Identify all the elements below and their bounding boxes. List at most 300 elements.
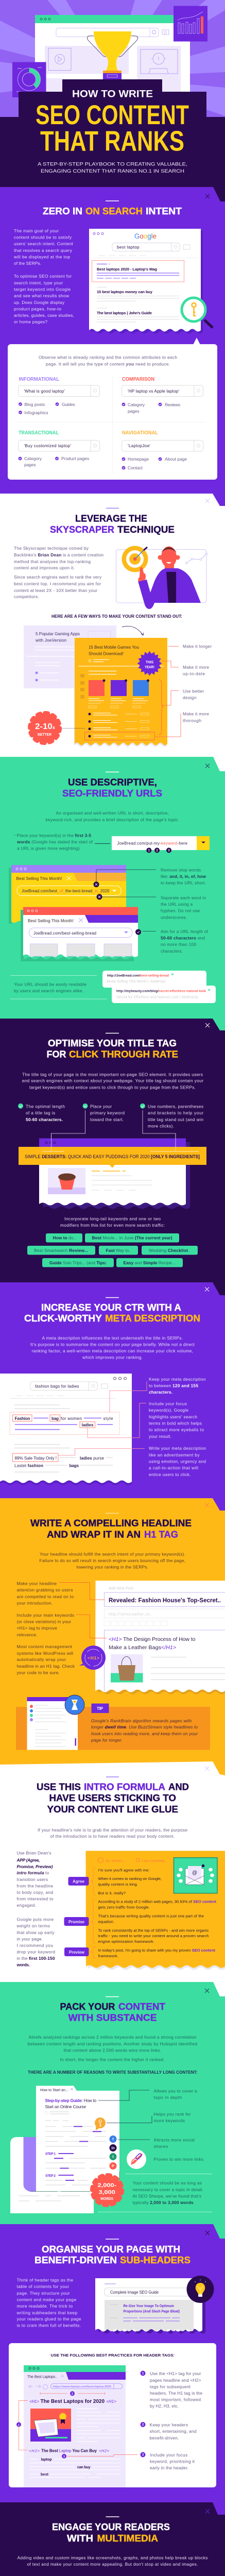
heading: CLICK THROUGH RATE <box>69 1049 178 1059</box>
panel: zero in on search intent <box>0 187 225 510</box>
text block: intro: target keyword into Google <box>14 286 71 292</box>
list: header tag tips: headers. The H1 tag is the <box>150 2391 202 2396</box>
type: informational: Blog posts <box>25 402 45 407</box>
text block: intro: keyword-rich, and provides a brief description of the page's topic. <box>45 817 179 822</box>
illustration: long article: How to Start an... <box>40 2089 68 2092</box>
illustration: intro example document: engine optimization framework. <box>98 1939 154 1944</box>
callouts: URL tips: to keep the URL short. <box>161 880 206 885</box>
text block: intro: competitors. <box>14 594 39 599</box>
tips: title tag checklist: and brackets to help your <box>148 1110 203 1115</box>
heading: LEVERAGE THE <box>75 513 147 523</box>
arrow: curved <box>122 626 144 635</box>
title: THAT RANKS <box>40 125 184 157</box>
heading: SKYSCRAPER <box>50 524 114 535</box>
list: header tag tips: by H2, H3, etc. <box>150 2403 179 2409</box>
type: informational: 'What is good laptop' <box>24 389 65 394</box>
illustration: improved document: Should Download! <box>89 651 124 656</box>
pills: keyword modifiers: Fast Way to.. <box>106 1248 131 1253</box>
type: comparison: Reviews <box>165 402 180 407</box>
illustration: intro example document: But is it, really? <box>98 1891 126 1895</box>
text block: intro: and see what results show <box>14 293 70 298</box>
text block: intro: will be displayed at the top <box>13 255 70 260</box>
illustration: CMS editor: Add New Post <box>109 1586 134 1590</box>
text block: intro: It's purpose is to summarise the content on your page briefly. While not a direct <box>30 1342 195 1347</box>
text block: APP formula: Use Brian Dean's <box>16 1851 51 1856</box>
text block: headline tips <box>16 1581 75 1675</box>
callouts: reasons for long content: topic in depth <box>153 2095 182 2100</box>
heading: USE THIS <box>37 1782 81 1792</box>
callouts: improvements: Make it more <box>183 665 209 670</box>
illustration: CMS editor <box>95 1581 225 1694</box>
text block: headline tips: your introduction. <box>16 1600 53 1605</box>
heading: USE DESCRIPTIVE, <box>68 777 157 787</box>
text block: intro: search intent, type your <box>14 280 63 285</box>
callout: keyword placement: Place your keyword(s) in the first 3-5 <box>16 833 91 838</box>
callouts: meta description tips: highlights users' search <box>149 1414 197 1419</box>
chart card: donut <box>12 62 46 97</box>
text block: headline tips: Make your headline <box>16 1581 57 1586</box>
illustration: SERP snippets: http://JoeBread.com/best-selling-bread <box>107 974 169 978</box>
type: informational: Guides <box>62 402 75 407</box>
callouts: meta description tips: Keep your meta description <box>149 1377 206 1382</box>
illustration: search result with meta description <box>0 1374 132 1485</box>
text block: headline tips: relevance. <box>16 1632 37 1637</box>
illustration: header tags browser <box>24 2365 126 2487</box>
text block: intro: your readers glued to the page <box>16 2316 81 2321</box>
callouts: meta description tips: entice users to click. <box>149 1472 191 1477</box>
text block: headline tips: headline in an H1 tag. Check <box>16 1664 75 1669</box>
panel: pack your content <box>0 1982 225 2241</box>
tips: title tag checklist: title tag stand out (and win <box>148 1117 203 1122</box>
type: informational: INFORMATIONAL <box>19 376 60 382</box>
heading <box>62 777 162 799</box>
text block: headline tips: are compelled to read on to <box>16 1594 74 1599</box>
text block: APP formula: drop your keyword <box>16 1950 55 1955</box>
heading: INCREASE YOUR CTR WITH A <box>41 1302 181 1313</box>
callouts: reasons for long content: more keywords <box>153 2118 185 2123</box>
subtitle: ENGAGING CONTENT THAT RANKS NO.1 IN SEARCH <box>41 168 184 174</box>
callouts: meta description tips: a call-to-action that will <box>149 1465 198 1470</box>
illustration: search result with meta description: Lastet fashion <box>14 1463 43 1468</box>
panel: search intent types <box>8 338 217 480</box>
badge: 2-10x better: BETTER <box>38 732 52 737</box>
icons: key and social <box>95 2117 146 2170</box>
tip box: RankBrain <box>16 1695 210 1750</box>
heading: ZERO IN <box>43 206 82 216</box>
badge: 2,000-3,000 words: WORDS <box>100 2197 113 2201</box>
callouts: improvements <box>154 644 212 737</box>
badge: this year <box>137 651 162 676</box>
heading: AND <box>168 1782 189 1792</box>
illustration: improved document <box>74 638 167 747</box>
badge: this year: YEAR! <box>145 666 154 669</box>
illustration: improved document: 15 Best Mobile Games You <box>89 645 139 650</box>
heading <box>30 1518 192 1539</box>
text block: intro: writing subheaders that keep <box>16 2310 77 2315</box>
list: header tag tips: Include your focus <box>150 2452 187 2458</box>
callouts: improvements: thorough <box>183 718 201 723</box>
text block: intro: articles, guides, case studies, <box>14 313 74 318</box>
callout: keyword placement: 1 <box>148 849 150 852</box>
illustration: CMS editor: <H1> The Design Process of How to <box>109 1636 196 1642</box>
text block: intro: Ahrefs analyzed rankings across 2 million keywords and found a strong correlation <box>29 2035 197 2040</box>
badge: 2-10x better <box>30 713 85 743</box>
list: header tag tips: short, entertaining, and <box>149 2429 197 2434</box>
callouts: URL tips: 50-60 characters and <box>161 936 205 941</box>
heading <box>43 206 182 216</box>
illustration: search result with meta description: ladies purse <box>80 1456 104 1461</box>
list: header tag tips: Keep your headers <box>149 2422 188 2428</box>
text block: intro: A meta description influences the text underneath the title in SERPs. <box>42 1335 183 1341</box>
illustration: search result with meta description: ladies <box>81 1423 94 1427</box>
callout: keyword placement: a URL is given more weighting). <box>17 846 81 851</box>
callouts: URL tips: Remove stop words <box>161 868 201 873</box>
text block: content length: typically 2,000 to 3,000 words. <box>133 2200 195 2205</box>
tip box: RankBrain: hook users into reading more, and keep them on your <box>91 1731 198 1736</box>
illustration: search result with meta description: Fashion <box>14 1416 30 1421</box>
text block: APP formula: transition users <box>16 1877 48 1882</box>
callouts: reasons for long content: Allows you to cover a <box>153 2089 197 2094</box>
badge: 2-10x better: 2-10x <box>35 722 55 731</box>
text block: intro: of the SERPs. <box>14 261 41 266</box>
illustration: original document: with JoeVersion <box>35 638 66 643</box>
type: transactional: TRANSACTIONAL <box>19 430 59 436</box>
tips: title tag checklist <box>18 1104 203 1152</box>
text block: APP formula: Google puts more <box>16 1917 54 1922</box>
tip box: RankBrain: Google's RankBrain algorithm rewards pages with <box>91 1718 192 1723</box>
illustration: Google search results window: The best laptops | John's Guide <box>97 311 152 315</box>
text block: intro: or home pages? <box>14 319 47 325</box>
illustration: header tags browser: <H2> <box>29 2448 40 2453</box>
subheading: THERE ARE A NUMBER OF REASONS TO WRITE SUBSTANTIALLY LONG CONTENT: <box>28 2070 198 2075</box>
heading: MULTIMEDIA <box>97 2533 158 2544</box>
illustration: header tags browser: can buy <box>77 2466 91 2469</box>
illustration: SERP snippets: Secret for Effortless and Natural Look | MyBeauty <box>116 995 199 999</box>
text block: intro: up. Does Google display <box>14 300 65 305</box>
text block: intro: of the introduction is to have readers read your body content. <box>50 1834 175 1839</box>
panel: search intent types: page. It will tell you the type of content you need to produce. <box>46 362 170 367</box>
list: header tag tips <box>140 2371 202 2470</box>
type: navigational <box>122 430 203 470</box>
illustration: SERP title tag <box>19 1133 206 1209</box>
panel: descriptive URLs <box>0 757 225 1036</box>
title: HOW TO WRITE <box>72 89 153 100</box>
subtitle: A STEP-BY-STEP PLAYBOOK TO CREATING VALUABLE, <box>38 162 187 167</box>
badge: 2,000-3,000 words <box>92 2175 122 2205</box>
text block: intro: If your headline's role is to grab the attention of your readers, the purpose <box>38 1827 187 1833</box>
text block: intro: An organised and well-written URL is short, descriptive, <box>56 810 169 816</box>
type: transactional <box>19 430 100 467</box>
callouts: meta description tips: using emotion, urgency and <box>149 1459 206 1464</box>
illustration: Google search results window: Google <box>134 232 157 240</box>
callouts: improvements: up-to-date <box>183 671 205 676</box>
text block: headline tips: <H1> tag to improve <box>16 1625 57 1631</box>
icons: key and social: f <box>112 2138 114 2141</box>
text block: intro: Your headline should fulfill the search intent of your primary keyword(s). <box>40 1552 185 1557</box>
callout connectors <box>59 1583 107 1638</box>
labels: agree, promise, preview: Preview <box>69 1950 85 1955</box>
text block: intro: table of contents for your <box>16 2284 69 2289</box>
heading: HAVE USERS STICKING TO <box>49 1793 176 1803</box>
icon: trophy <box>87 31 138 80</box>
illustration: header tags browser: 2 <box>72 2393 73 2396</box>
illustration: long article: Start an Online Course <box>45 2105 86 2109</box>
heading: YOUR CONTENT LIKE GLUE <box>47 1804 178 1815</box>
heading: PACK YOUR <box>60 2002 115 2012</box>
text block: intro: lowering your ranking in the SERPs. <box>76 1564 148 1569</box>
text block: headline tips: attention grabbing so users <box>16 1587 73 1592</box>
text block: intro <box>28 2035 197 2062</box>
list: header tag tips: tags for subsequent <box>150 2384 191 2389</box>
heading: SUB-HEADERS <box>120 2255 191 2265</box>
type: comparison: 'HP laptop vs Apple laptop' <box>128 389 179 394</box>
heading: META DESCRIPTION <box>105 1313 200 1324</box>
text block: modifiers intro: modifiers from this list for even more search traffic: <box>60 1223 165 1228</box>
callouts: URL tips: Separate each word in <box>161 895 206 901</box>
text block: headline tips: your code to be sure. <box>16 1670 60 1675</box>
icons: key and social: in <box>111 2146 115 2150</box>
illustration: good URL window: Best Selling This Month! <box>28 919 74 923</box>
text block: intro: Backlinko's Brian Dean is a content creation <box>14 552 103 557</box>
text block: APP formula: I recommend you <box>16 1943 53 1948</box>
text block: intro: that content above 2,500 words wins more links. <box>64 2047 161 2053</box>
text block: intro: best content top. I recommend you aim for <box>14 581 101 586</box>
callouts: meta description tips: keyword(s). Google <box>149 1408 188 1413</box>
pills: keyword modifiers: How to do.. <box>53 1235 76 1241</box>
illustration: CMS editor: Make a Leather Bags</H1> <box>109 1645 176 1651</box>
illustration: search result with meta description: 89% Sale Today Only ! <box>14 1456 57 1461</box>
text block: APP formula: engaged. <box>16 1903 36 1908</box>
illustration: intro example document: gets zero traffic from Google. <box>98 1905 150 1910</box>
callout: keyword placement: JoeBread.com/put-my-keyword-here <box>117 841 187 846</box>
text block: intro: and search engines with context about your webpage. Your title tag should contain your <box>22 1078 203 1083</box>
tip box: RankBrain: TIP <box>97 1706 103 1711</box>
heading: CONTENT <box>118 2002 165 2012</box>
icons: key and social: P <box>112 2165 114 2168</box>
illustration: good URL window <box>21 907 138 961</box>
illustration: header tags browser: The Best Laptop You Can Buy <box>41 2448 97 2453</box>
text block: APP formula: Promise, Preview) <box>16 1864 53 1869</box>
callouts: meta description tips: to attract more eyeballs to <box>149 1427 204 1432</box>
text block: APP formula: in your page. <box>16 1936 43 1941</box>
text block: intro: The Skyscraper technique coined by <box>14 546 89 551</box>
badge: 2,000-3,000 words: 3,000 <box>99 2190 115 2196</box>
heading: FOR <box>46 1049 66 1059</box>
tip box: RankBrain: longer dwell time. Use BuzzStream style headlines to <box>91 1724 198 1730</box>
illustration: bad URL window <box>9 865 126 924</box>
callouts: URL tips: like: and, it, in, of, how <box>161 874 206 879</box>
pills: keyword modifiers: Guide Solo Trips... (and Tips) <box>49 1260 107 1265</box>
text block: headline tips: (or close variations) in your <box>16 1619 71 1624</box>
illustration: intro example document: I'm sure you'll agree with me: <box>98 1868 149 1872</box>
text block: intro <box>39 1552 185 1569</box>
illustration: search result with meta description: fashion bags for ladies <box>35 1384 79 1389</box>
tips: title tag checklist: Use numbers, parentheses <box>148 1104 203 1109</box>
text block: modifiers intro <box>60 1216 165 1228</box>
text block: readable URLs <box>10 975 107 999</box>
list: header tag tips: 3 <box>142 2454 144 2457</box>
illustration: intro example document <box>85 1851 225 1970</box>
type: transactional: pages <box>24 462 36 467</box>
heading: CLICK-WORTHY <box>24 1313 102 1324</box>
heading: SEO-FRIENDLY URLS <box>62 788 162 799</box>
pills: keyword modifiers: Best Movie... in June (The current year) <box>92 1235 172 1241</box>
callouts: reasons for long content: Helps you rank for <box>153 2111 191 2116</box>
list: header tag tips: 2 <box>142 2424 144 2427</box>
illustration: header tags browser: https://www.laptop.com/best-laptop-2020 <box>53 2385 111 2388</box>
illustration: Google search results window: 15 best laptops money can buy <box>97 290 153 294</box>
type: navigational: About page <box>165 456 187 462</box>
text block: APP formula: intro formula to <box>16 1870 49 1875</box>
callouts: meta description tips: your result. <box>149 1434 171 1439</box>
callouts: reasons for long content: shares <box>153 2144 168 2149</box>
illustration: CMS editor: Revealed: Fashion House's Top-Secret.. <box>109 1597 221 1604</box>
callouts: URL tips: no more than 100 <box>161 942 196 947</box>
text block: intro: is to cram them full of benefits. <box>16 2323 81 2328</box>
text block: APP formula: to body copy, and <box>16 1890 53 1895</box>
illustration: sub-header example: Re-Size Your Image To Optimum <box>124 2304 174 2308</box>
heading <box>37 1782 189 1815</box>
heading: ORGANISE YOUR PAGE WITH <box>42 2244 180 2255</box>
illustration: Google search results window <box>89 229 203 334</box>
pills: keyword modifiers: Wedding Checklist.. <box>149 1248 191 1253</box>
text block: intro: more readable. The trick to <box>16 2303 73 2309</box>
illustration: bad URL window: Best Selling This Month! <box>16 876 62 881</box>
illustration: intro example document: equation. <box>98 1920 114 1924</box>
annotation lines <box>16 2401 137 2459</box>
illustration: original document <box>24 625 116 688</box>
icon: light bulb <box>186 2276 214 2303</box>
text block: APP formula <box>16 1851 55 1967</box>
tips: title tag checklist: The optimal length <box>26 1104 65 1109</box>
heading <box>46 1038 178 1059</box>
type: comparison: Category <box>128 402 145 407</box>
text block: intro: product pages, how-to <box>14 306 61 311</box>
type: comparison: pages <box>128 409 139 414</box>
panel: skyscraper technique <box>0 494 225 773</box>
callouts: URL tips: hyphen. Do not use <box>161 908 200 913</box>
illustration: CMS editor: http://JohnLeather.co... <box>109 1612 153 1617</box>
illustration: header tags browser: best <box>41 2473 49 2477</box>
type: navigational: NAVIGATIONAL <box>122 430 159 436</box>
illustration: browser window <box>35 15 190 92</box>
callouts: reasons for long content <box>98 2089 203 2162</box>
text block: intro: Adding video and custom images like screenshots, graphs, and photos help break up blocks <box>18 2555 207 2561</box>
illustration: intro example document: @ <box>192 1870 197 1876</box>
callouts: improvements: Make it longer <box>183 644 212 649</box>
text block: intro: page. They structure your <box>16 2291 70 2296</box>
panel: intro formula <box>0 1761 225 1999</box>
type: informational <box>19 376 100 415</box>
callouts: reasons for long content: Proven to win more links <box>153 2157 203 2162</box>
tip box: RankBrain: page for longer. <box>91 1737 123 1742</box>
text block: APP formula: APP (Agree, <box>16 1858 40 1863</box>
badge: H1 <box>79 1646 106 1670</box>
panel: search intent types: Observe what is already ranking and the common attributes to each <box>39 354 177 360</box>
callouts: URL tips <box>94 868 209 954</box>
panel: sub-headers <box>0 2224 225 2517</box>
illustration: search result with meta description: bags <box>69 1463 79 1468</box>
text block: content length: At SEO Sherpa, we've found that's <box>133 2194 201 2199</box>
chart card: bars <box>174 6 207 41</box>
callouts: URL tips: underscores. <box>161 915 187 920</box>
callout: keyword placement: 3 <box>168 849 170 852</box>
illustration: intro example document: According to a study of 2 million web pages, 90.63% of SEO content <box>98 1899 216 1904</box>
heading: TECHNIQUE <box>117 524 175 535</box>
callouts: improvements: Make it more <box>183 711 209 717</box>
text block: APP formula: weight on terms <box>16 1923 50 1928</box>
type: informational: Infographics <box>25 410 48 415</box>
illustration: search result with meta description: bag <box>51 1416 59 1421</box>
icon: magnifier with key <box>182 298 213 328</box>
panel: headline and H1 <box>0 1498 225 1777</box>
illustration: sub-header example: Complete Image SEO Guide <box>110 2290 159 2295</box>
heading <box>52 2522 170 2544</box>
text block: readable URLs: by users and search engines alike. <box>14 988 83 993</box>
illustration: sub-header example: Proportions (And Slash Page Bloat) <box>124 2310 180 2313</box>
callouts: improvements: Use better <box>183 688 204 693</box>
illustration: bad URL window: JoeBread.com/best_of_the-best-bread_in_2020 <box>22 889 110 893</box>
text block: intro <box>45 810 179 822</box>
illustration: search result with meta description: style <box>103 1416 113 1421</box>
heading <box>60 2002 165 2023</box>
text block: APP formula: words. <box>16 1962 30 1967</box>
heading <box>50 513 175 535</box>
callout: keyword placement: words (Google has stated the start of <box>16 839 93 844</box>
illustration: good URL window: JoeBread.com/best-selling-bread <box>33 931 96 936</box>
type: transactional: Product pages <box>61 456 89 461</box>
illustration: person with target <box>116 546 207 609</box>
text block: headline tips: systems like WordPress will <box>16 1651 73 1656</box>
labels: agree, promise, preview: Promise <box>68 1920 85 1924</box>
callouts: meta description tips: characters. <box>149 1389 172 1395</box>
illustration: intro example document: That's because writing quality content is just one part of the <box>98 1913 204 1919</box>
list: header tag tips: benefit-driven. <box>149 2435 179 2441</box>
tips: title tag checklist: toward the start. <box>90 1117 124 1122</box>
text block: intro <box>14 546 103 599</box>
text block: intro: target keyword(s) and entice users to click through to your page from the SERPs. <box>29 1085 196 1090</box>
text block: intro: between content length and ranking positions. Another study by Hubspot identified <box>28 2041 197 2046</box>
text block: intro: The title tag of your page is the most important on-page SEO element. It provides users <box>22 1072 203 1077</box>
list: header tag tips: Use the <H1> tag for your <box>150 2371 201 2376</box>
panel: title tag <box>0 1019 225 1298</box>
tips: title tag checklist: primary keyword <box>90 1110 125 1115</box>
type: navigational: Homepage <box>128 456 149 462</box>
text block: intro <box>30 1335 195 1360</box>
illustration: intro example document: quality content is king. <box>98 1882 138 1887</box>
text block: headline tips: automatically wrap your <box>16 1657 66 1662</box>
heading: ENGAGE YOUR READERS <box>52 2522 170 2532</box>
text block: intro: Think of header tags as the <box>16 2277 73 2282</box>
text block: intro: content should be to satisfy <box>14 235 72 240</box>
illustration: intro example document: traffic - you need to write your content around a proven search <box>98 1934 209 1938</box>
labels: agree, promise, preview <box>64 1877 89 1956</box>
callouts: URL tips: Aim for a URL length of <box>161 929 209 934</box>
text block: content length: Your content should be as long as <box>133 2180 202 2185</box>
heading: WITH SUBSTANCE <box>68 2012 157 2023</box>
illustration: intro example document: In today's post, I'm going to share with you my proven SEO content <box>98 1948 215 1953</box>
heading: OPTIMISE YOUR TITLE TAG <box>48 1038 177 1048</box>
text block: intro <box>16 2277 81 2328</box>
illustration: intro example document: When it comes to ranking on Google, <box>98 1876 162 1881</box>
tips: title tag checklist: more clicks). <box>148 1123 174 1128</box>
illustration: SERP snippets <box>102 971 216 1003</box>
text block: intro: users' search intent. Content <box>14 241 74 246</box>
text block: intro: content and make your page <box>16 2297 76 2302</box>
text block: intro: In short, the longer the content the higher it ranked. <box>60 2057 165 2062</box>
text block: intro: Since search engines want to rank the very <box>14 574 102 580</box>
annotation lines: 1 <box>18 2424 20 2427</box>
